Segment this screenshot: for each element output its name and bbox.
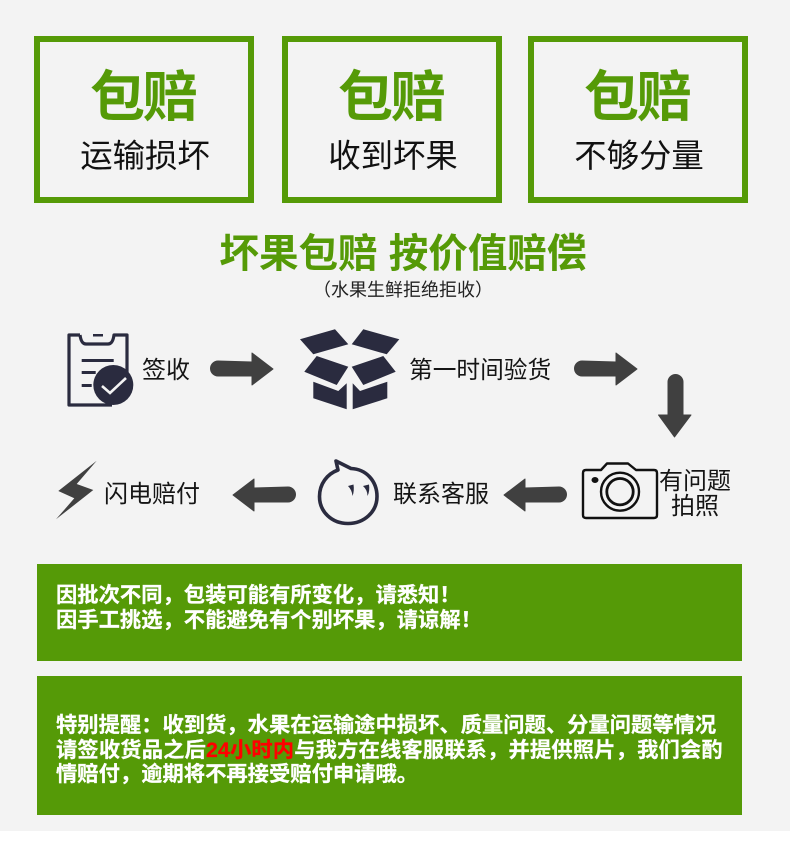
card: short weight: 包赔	[584, 66, 690, 128]
arrow: down to photo	[658, 374, 692, 438]
card: received damaged fruit: 收到坏果	[328, 138, 458, 174]
reminder text: 请签收货品之后24小时内与我方在线客服联系，并提供照片，我们会酌	[56, 738, 723, 762]
icon: signed clipboard	[67, 333, 134, 407]
label: lightning compensation: 闪电赔付	[104, 481, 200, 508]
reminder text: 情赔付，逾期将不再接受赔付申请哦。	[56, 762, 418, 786]
icon: lightning bolt	[56, 461, 96, 519]
card: transport damage: 包赔	[90, 66, 196, 128]
card: short weight: 不够分量	[574, 138, 704, 174]
arrow: support to compensation	[232, 478, 296, 512]
notice panel: special reminder	[37, 676, 742, 815]
label: inspect immediately: 第一时间验货	[409, 358, 551, 384]
notice text line 1: 因批次不同，包装可能有所变化，请悉知！	[56, 583, 461, 607]
icon: open box	[300, 329, 400, 410]
card: received damaged fruit	[282, 36, 502, 203]
arrow: inspect to next	[574, 352, 638, 386]
heading: 坏果包赔 按价值赔偿	[219, 232, 587, 276]
reminder text: 特别提醒：收到货，水果在运输途中损坏、质量问题、分量问题等情况	[56, 713, 716, 737]
label: contact support: 联系客服	[393, 481, 489, 508]
card: transport damage	[34, 36, 254, 203]
label: photograph the problem: 拍照	[671, 493, 719, 520]
subheading: （水果生鲜拒绝拒收）	[313, 280, 493, 300]
icon: chat face	[318, 459, 379, 526]
reminder text	[56, 713, 723, 786]
arrow: photo to support	[504, 478, 567, 512]
notice panel: packaging and selection	[37, 564, 742, 661]
label: sign: 签收	[142, 357, 190, 384]
card: short weight	[528, 36, 748, 203]
icon: camera	[582, 462, 658, 520]
notice text line 2: 因手工挑选，不能避免有个别坏果，请谅解！	[56, 608, 482, 632]
label: photograph the problem	[659, 468, 731, 520]
label: photograph the problem: 有问题	[659, 468, 731, 495]
card: received damaged fruit: 包赔	[338, 66, 444, 128]
arrow: sign to box	[210, 352, 274, 386]
card: transport damage: 运输损坏	[80, 138, 210, 174]
